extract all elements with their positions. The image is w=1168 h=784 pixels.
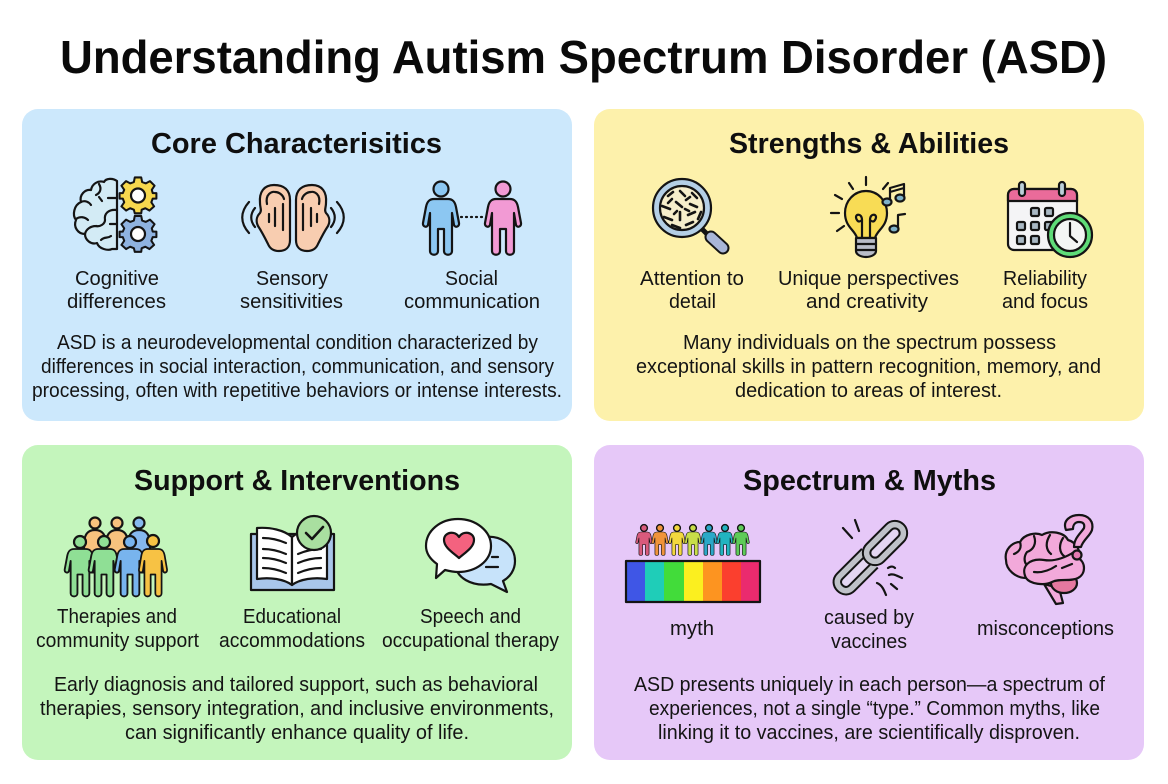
description: strengths: dedication to areas of interest.	[735, 380, 1002, 402]
description: spectrum and myths: experiences, not a single “type.” Common myths, like	[649, 698, 1100, 720]
label: sensory sensitivities	[240, 268, 343, 313]
label: speech and occupational therapy: occupational therapy	[382, 630, 559, 652]
label: social communication: communication	[404, 291, 540, 313]
label: unique perspectives and creativity	[778, 268, 959, 313]
label: caused by vaccines: caused by	[824, 607, 914, 629]
icon: group of people	[65, 518, 167, 596]
panel: strengths and abilities	[594, 109, 1144, 421]
description: core characteristics	[32, 332, 562, 402]
heading: support and interventions: Support & Interventions	[134, 465, 460, 497]
label: attention to detail	[640, 268, 744, 313]
panel: spectrum and myths	[594, 445, 1144, 760]
heading: spectrum and myths: Spectrum & Myths	[743, 465, 996, 497]
label: caused by vaccines	[824, 607, 914, 653]
label: cognitive differences: differences	[67, 291, 166, 313]
description: spectrum and myths	[634, 674, 1105, 744]
icon: brain and gears	[74, 177, 156, 252]
description: spectrum and myths: linking it to vaccines, are scientifically disproven.	[658, 722, 1080, 744]
icon: broken chain link	[834, 520, 907, 595]
description: core characteristics: ASD is a neurodevelopmental condition characterized by	[57, 332, 538, 354]
icon: ears with sound waves	[242, 185, 344, 251]
heading: strengths and abilities: Strengths & Abilities	[729, 128, 1009, 160]
icon: people on a rainbow bar	[626, 525, 760, 602]
label: caused by vaccines: vaccines	[831, 631, 907, 653]
description: strengths	[636, 332, 1101, 402]
label: social communication	[404, 268, 540, 313]
label: therapies and community support	[36, 606, 199, 652]
description: support: therapies, sensory integration, and inclusive environments,	[40, 698, 554, 720]
description: support: can significantly enhance quality of life.	[125, 722, 469, 744]
icon: calendar with clock	[1008, 182, 1092, 257]
label: myth: myth	[670, 618, 714, 640]
icon: brain with question mark	[1006, 515, 1092, 604]
icon: light bulb and music notes	[831, 177, 905, 257]
label: social communication: Social	[445, 268, 498, 290]
label: speech and occupational therapy: Speech and	[420, 606, 521, 628]
label: misconceptions: misconceptions	[977, 618, 1114, 640]
panel: core characteristics	[22, 109, 572, 421]
icon: magnifying glass	[653, 179, 723, 248]
label: attention to detail: Attention to	[640, 268, 744, 290]
description: core characteristics: differences in social interaction, communication, and sensory	[41, 356, 554, 378]
title: Understanding Autism Spectrum Disorder (ASD)	[60, 31, 1107, 83]
label: cognitive differences: Cognitive	[75, 268, 159, 290]
label: cognitive differences	[67, 268, 166, 313]
label: educational accommodations: accommodations	[219, 630, 365, 652]
description: strengths: exceptional skills in pattern recognition, memory, and	[636, 356, 1101, 378]
label: unique perspectives and creativity: Unique perspectives	[778, 268, 959, 290]
label: speech and occupational therapy	[382, 606, 559, 652]
icon: open book with check mark	[251, 516, 334, 590]
label: therapies and community support: community support	[36, 630, 199, 652]
description: support: Early diagnosis and tailored support, such as behavioral	[54, 674, 538, 696]
label: sensory sensitivities: sensitivities	[240, 291, 343, 313]
description: support	[40, 674, 554, 744]
label: educational accommodations	[219, 606, 365, 652]
icon: two people connected	[423, 182, 521, 255]
label: reliability and focus	[1002, 268, 1088, 313]
label: reliability and focus: and focus	[1002, 291, 1088, 313]
label: reliability and focus: Reliability	[1003, 268, 1087, 290]
label: attention to detail: detail	[669, 291, 716, 313]
label: sensory sensitivities: Sensory	[256, 268, 328, 290]
description: core characteristics: processing, often with repetitive behaviors or intense interests.	[32, 380, 562, 402]
label: educational accommodations: Educational	[243, 606, 341, 628]
label: therapies and community support: Therapies and	[57, 606, 177, 628]
heading: core characteristics: Core Characterisitics	[151, 128, 442, 160]
label: unique perspectives and creativity: and creativity	[806, 291, 928, 313]
panel: support and interventions	[22, 445, 572, 760]
icon: speech bubbles with heart	[426, 519, 515, 592]
description: spectrum and myths: ASD presents uniquely in each person—a spectrum of	[634, 674, 1105, 696]
description: strengths: Many individuals on the spectrum possess	[683, 332, 1056, 354]
